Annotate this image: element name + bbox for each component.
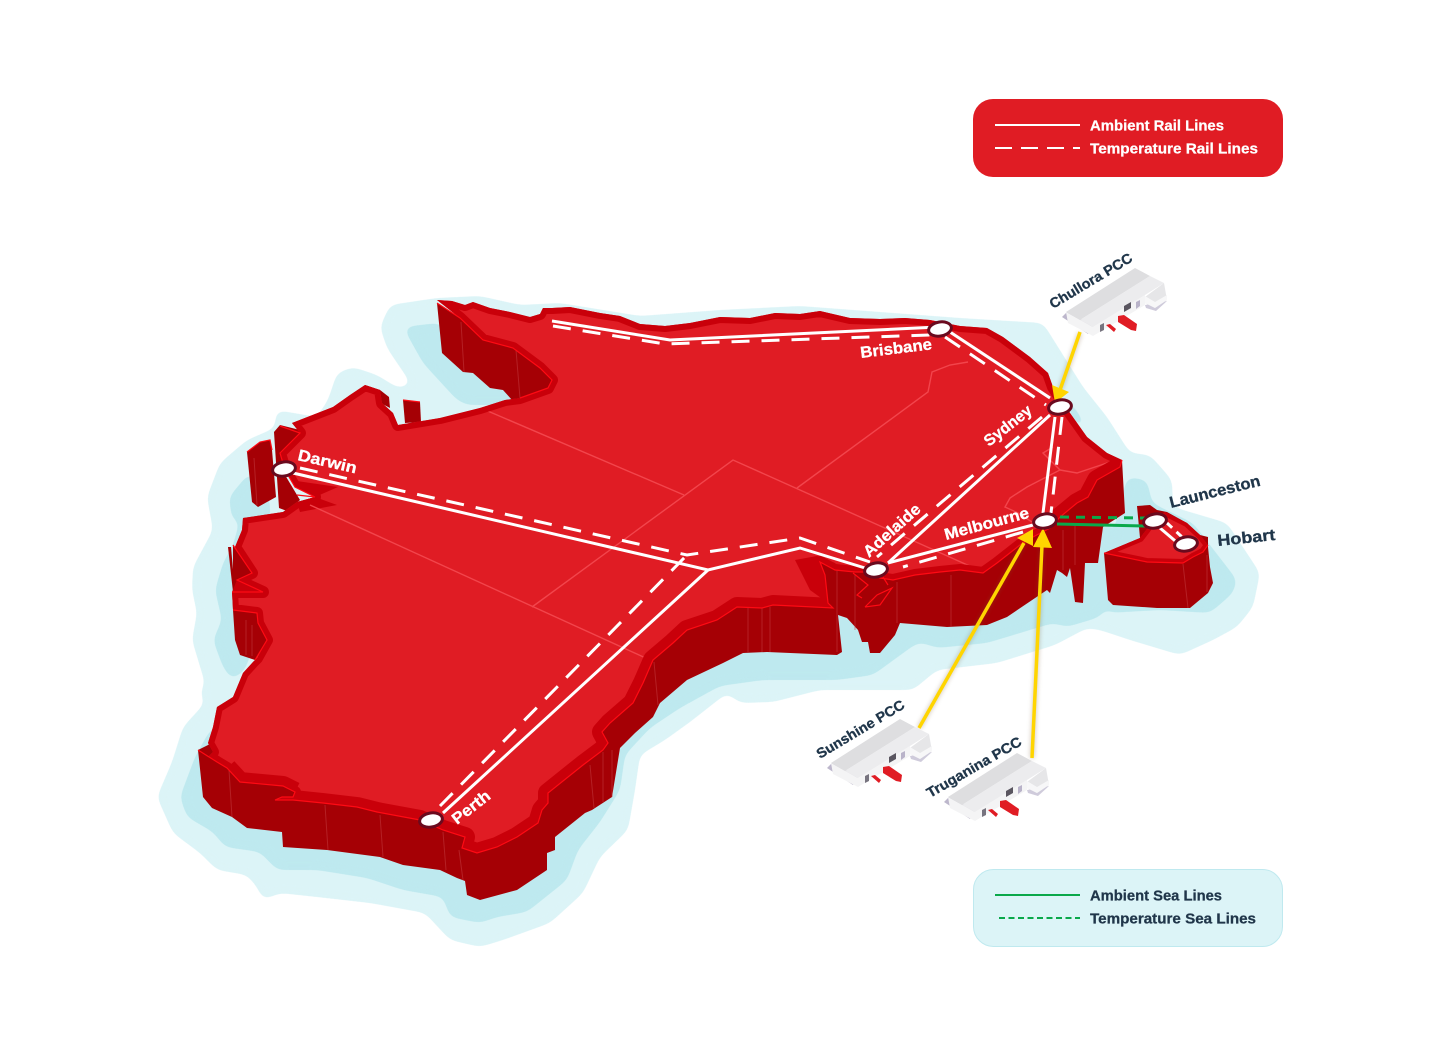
city label: Darwin: Darwin (296, 447, 358, 477)
water: inner blue shallows (180, 323, 1237, 923)
label: Sunshine PCC: Sunshine PCC (813, 696, 907, 762)
arrow: Chullora to Sydney (1052, 332, 1080, 403)
city label: Perth: Perth (449, 788, 494, 828)
Tasmania island (1100, 505, 1215, 608)
legend: rail lines (973, 99, 1283, 177)
city label: Brisbane: Brisbane (859, 336, 933, 362)
city label: Melbourne: Melbourne (943, 505, 1031, 544)
legend: rail lines: Ambient Rail Lines (1090, 118, 1224, 134)
city label: Launceston: Launceston (1168, 473, 1262, 512)
warehouse: Chullora PCC (1062, 268, 1167, 336)
mainland top surface (190, 290, 1140, 870)
label: Chullora PCC: Chullora PCC (1046, 249, 1135, 312)
arrow: Truganina to Melbourne (1032, 528, 1052, 758)
city label: Adelaide: Adelaide (860, 501, 925, 561)
rail lines: temperature dashed (300, 326, 1182, 806)
legend: sea lines: Ambient Sea Lines (1090, 888, 1222, 904)
legend: sea lines (974, 870, 1282, 946)
state borders (310, 362, 1122, 660)
wall seams (229, 322, 1075, 880)
warehouse: Sunshine PCC (827, 719, 932, 787)
yellow arrow shadows (919, 333, 1080, 758)
coastline highlights (198, 303, 1122, 853)
water: outer pale halo (157, 296, 1260, 947)
city nodes (271, 320, 1199, 829)
city label: Sydney: Sydney (981, 402, 1036, 450)
rail lines: ambient solid (293, 321, 1180, 813)
mainland extruded walls (198, 303, 1125, 900)
legend: rail lines: Temperature Rail Lines (1090, 142, 1258, 158)
legend: sea lines: Temperature Sea Lines (1090, 912, 1256, 928)
arrow: Sunshine to Melbourne (919, 529, 1033, 728)
warehouse: Truganina PCC (944, 753, 1049, 821)
infographic canvas (158, 99, 1283, 947)
label: Truganina PCC: Truganina PCC (924, 733, 1024, 801)
city label: Hobart: Hobart (1217, 527, 1277, 550)
sea lines (1057, 517, 1145, 526)
